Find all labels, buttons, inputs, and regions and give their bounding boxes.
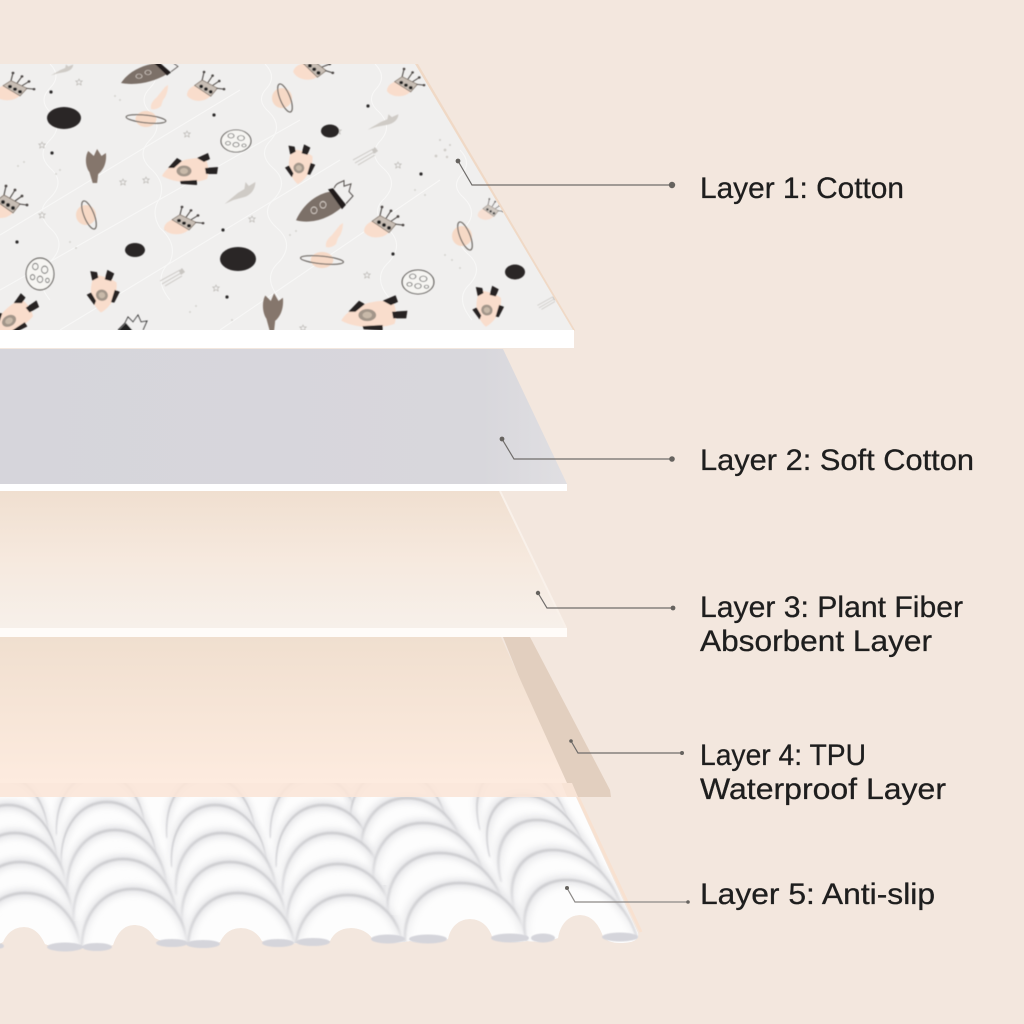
label: layer 1: Layer 1: Cotton bbox=[700, 172, 904, 205]
ringed planets bbox=[126, 111, 166, 127]
label: layer 2: Layer 2: Soft Cotton bbox=[700, 444, 974, 477]
label: layer 4: Layer 4: TPU bbox=[700, 739, 866, 772]
leader line: layer 4 bbox=[569, 739, 684, 755]
layer 2: soft cotton bbox=[0, 349, 567, 491]
layer 4: TPU waterproof layer bbox=[0, 637, 611, 797]
speckle dots bbox=[17, 95, 461, 321]
leader line: layer 3 bbox=[536, 591, 675, 610]
stars bbox=[39, 79, 401, 331]
leader line: layer 5 bbox=[565, 886, 690, 904]
label: layer 3: Absorbent Layer bbox=[700, 625, 932, 658]
leader line: layer 2 bbox=[500, 437, 675, 462]
label: layer 4 bbox=[700, 739, 946, 806]
label: layer 3: Layer 3: Plant Fiber bbox=[700, 591, 963, 624]
rockets bbox=[162, 153, 218, 185]
leg end ellipses bbox=[0, 932, 638, 952]
label: layer 3 bbox=[700, 591, 963, 658]
flame outline bbox=[118, 315, 147, 330]
small dots bbox=[15, 90, 423, 299]
feathers and comets bbox=[86, 149, 106, 183]
label: layer 5: Layer 5: Anti-slip bbox=[700, 878, 935, 911]
aliens bbox=[0, 72, 35, 100]
layer 3: plant fiber absorbent layer bbox=[0, 491, 567, 637]
leader line: layer 1 bbox=[456, 159, 675, 188]
moons bbox=[221, 130, 251, 152]
brown rockets bbox=[120, 64, 179, 85]
black planets bbox=[47, 107, 525, 280]
quilting and wrinkles bbox=[0, 64, 477, 330]
label: layer 4: Waterproof Layer bbox=[700, 773, 946, 806]
layer 1: cotton space pattern bbox=[0, 48, 575, 348]
layer 5: anti-slip arches bbox=[0, 797, 642, 952]
